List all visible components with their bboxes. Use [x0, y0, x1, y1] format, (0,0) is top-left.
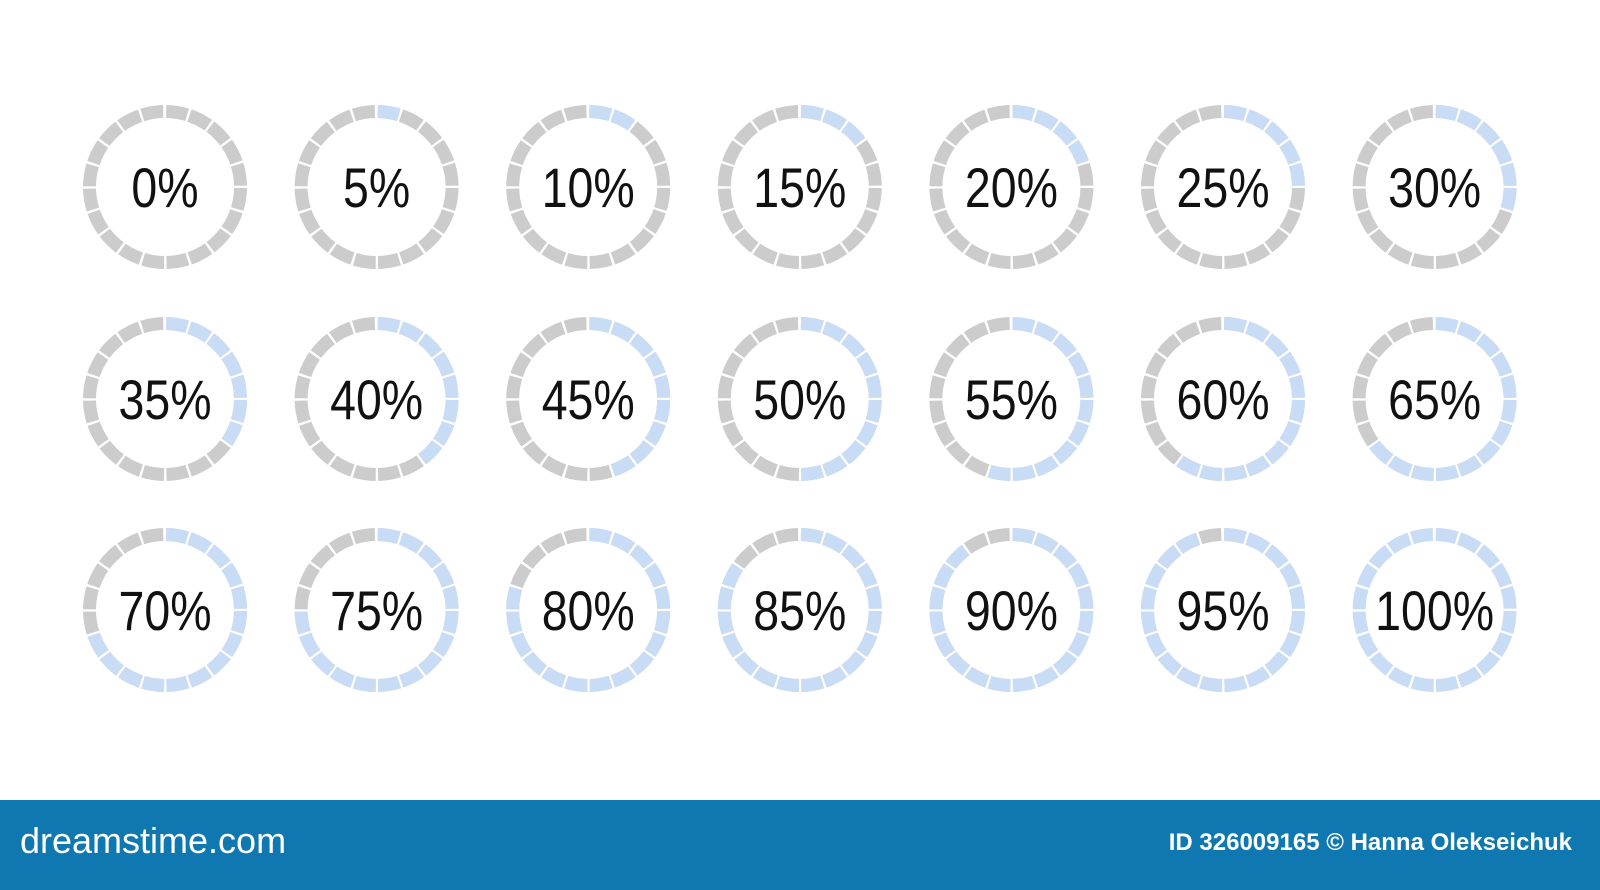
- dial 50%: [724, 324, 875, 474]
- footer credit: ID 326009165 © Hanna Olekseichuk: [1169, 829, 1572, 856]
- dial 55%: 55%: [965, 368, 1058, 431]
- dial 40%: 40%: [330, 368, 423, 431]
- dial 100%: 100%: [1375, 579, 1494, 642]
- dial 75%: [301, 534, 452, 686]
- dial 30%: [1359, 112, 1510, 262]
- dial 15%: [724, 112, 875, 262]
- dial 15%: 15%: [753, 156, 846, 219]
- dial 20%: [936, 112, 1087, 262]
- dial 65%: 65%: [1388, 368, 1481, 431]
- dial 60%: [1148, 324, 1298, 474]
- dial 95%: 95%: [1176, 579, 1270, 642]
- dial 90%: 90%: [965, 579, 1058, 642]
- dial 35%: [90, 324, 240, 474]
- dial 5%: 5%: [343, 156, 410, 219]
- dial 85%: [724, 534, 875, 686]
- dial 70%: [90, 534, 240, 686]
- dial 20%: 20%: [965, 156, 1058, 219]
- dial 90%: [936, 534, 1087, 686]
- dial 50%: 50%: [753, 368, 846, 431]
- dial 95%: [1148, 534, 1298, 686]
- dial 75%: 75%: [330, 579, 423, 642]
- dial 10%: 10%: [542, 156, 635, 219]
- dial 30%: 30%: [1388, 156, 1481, 219]
- dial 35%: 35%: [118, 368, 212, 431]
- dial 85%: 85%: [753, 579, 846, 642]
- footer logo: dreamstime.com: [20, 820, 286, 861]
- dial 0%: 0%: [131, 156, 199, 219]
- dial 65%: [1359, 324, 1510, 474]
- dial 80%: [513, 534, 664, 686]
- dial 25%: 25%: [1176, 156, 1270, 219]
- dial 70%: 70%: [118, 579, 212, 642]
- dial 60%: 60%: [1176, 368, 1270, 431]
- dial 25%: [1148, 112, 1298, 262]
- dial 80%: 80%: [542, 579, 635, 642]
- dial 40%: [301, 324, 452, 474]
- dial 45%: 45%: [542, 368, 635, 431]
- dial 45%: [513, 324, 664, 474]
- footer bar: [0, 800, 1600, 890]
- dial 10%: [513, 112, 664, 262]
- dial 100%: [1359, 534, 1510, 686]
- dial 55%: [936, 324, 1087, 474]
- dial 5%: [301, 112, 452, 262]
- dial 0%: [90, 112, 240, 262]
